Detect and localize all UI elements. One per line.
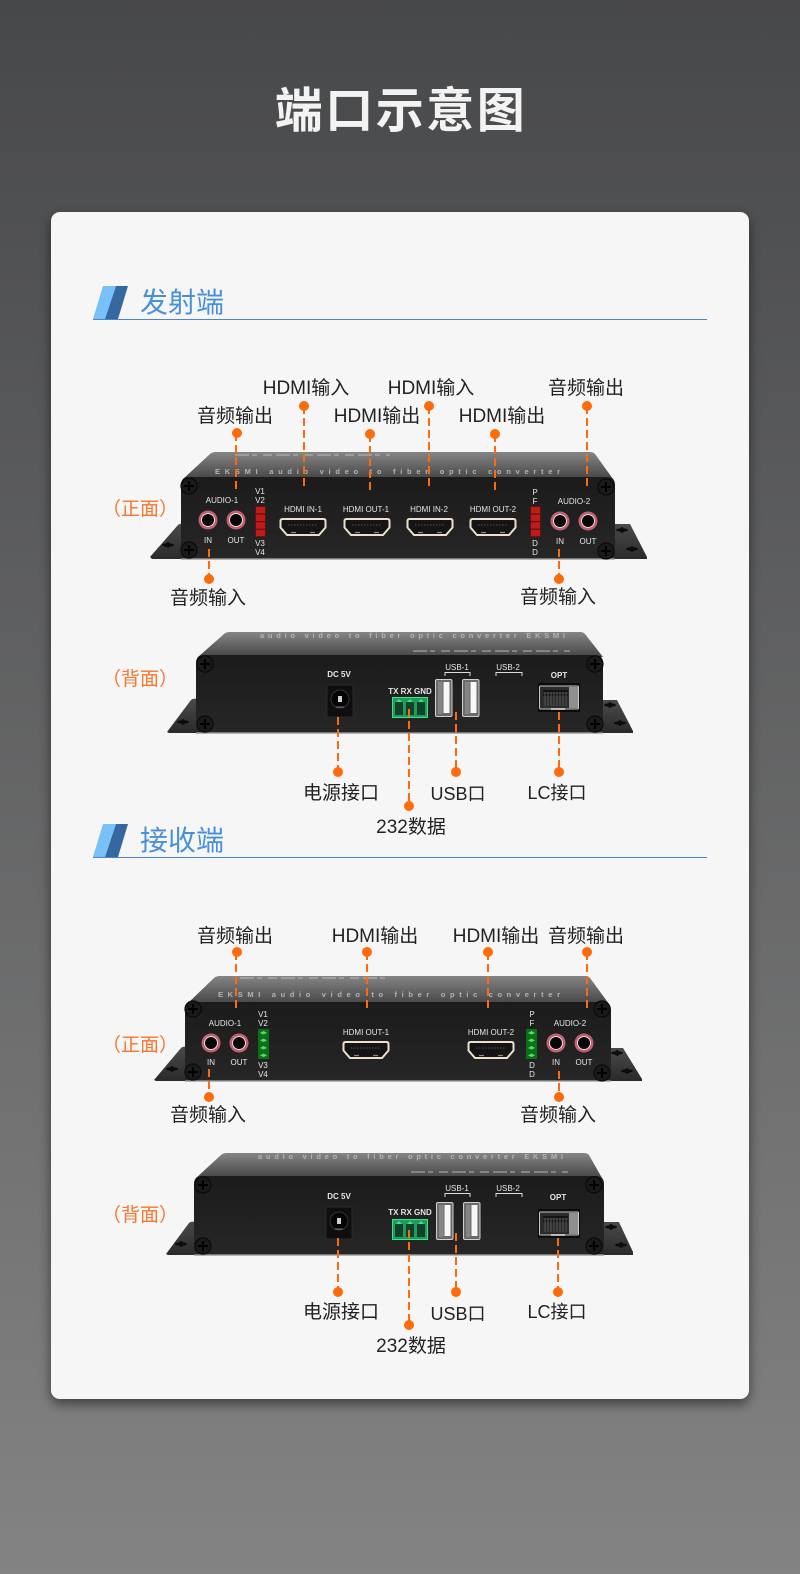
callout: power: 电源接口: [303, 1301, 379, 1323]
hdmi in-1: HDMI IN-1: [284, 505, 322, 514]
callout: audio out 1: [197, 405, 273, 492]
dc 5v port: [327, 670, 353, 717]
label: (背面): （背面）: [102, 1204, 178, 1226]
top printing: EKSMI audio video to fiber optic converter: [215, 467, 560, 476]
feet: [167, 699, 633, 733]
PFDD indicators: D: [529, 1070, 535, 1079]
callout: lc: [527, 712, 587, 803]
hdmi out-1: HDMI OUT-1: [343, 505, 390, 514]
usb-1 ports: USB-1: [445, 1184, 469, 1193]
audio-1 group: OUT: [228, 536, 245, 545]
label: (背面): （背面）: [102, 668, 178, 690]
callout: usb: USB口: [430, 1304, 486, 1324]
callout: usb: [430, 712, 486, 804]
usb-2 label: [496, 663, 522, 676]
audio-2 group: [546, 1019, 594, 1067]
rs232 terminal: TX RX GND: [388, 1208, 432, 1217]
callout: lc: [527, 1238, 587, 1322]
hdmi in-2: HDMI IN-2: [410, 505, 448, 514]
label: (正面): （正面）: [102, 1034, 178, 1056]
hdmi in-1: [280, 505, 326, 535]
rs232 terminal: [388, 687, 432, 718]
label: (正面): （正面）: [102, 498, 178, 520]
screws: [181, 478, 614, 559]
callout: audio out 2: [548, 925, 624, 1012]
transmitter front callouts: [102, 377, 624, 609]
top printing: EKSMI audio video to fiber optic converter: [218, 990, 560, 999]
audio-1 group: [198, 496, 246, 545]
receiver front device: [154, 976, 642, 1082]
audio-1 group: OUT: [231, 1058, 248, 1067]
base highlight: [181, 558, 615, 560]
callout: hdmi in 2: [388, 377, 474, 490]
main white panel: [51, 212, 749, 1399]
callout: audio out 1: [197, 925, 273, 1012]
callout: power: 电源接口: [303, 782, 379, 804]
callout: audio out 1: 音频输出: [197, 925, 273, 947]
callout: audio out 2: 音频输出: [548, 925, 624, 947]
hdmi out-2: [470, 505, 517, 535]
feet: [154, 1047, 642, 1081]
heading: 接收端: [93, 824, 707, 858]
PFDD indicators: F: [530, 1019, 535, 1028]
PFDD indicators: [530, 488, 541, 557]
callout: lc: LC接口: [527, 783, 587, 803]
rs232 terminal: TX RX GND: [388, 687, 432, 696]
hdmi out-1: [343, 1028, 390, 1058]
callout: hdmi out 1: [334, 405, 420, 492]
callout: audio out 2: 音频输出: [548, 377, 624, 399]
callout: hdmi out 1: HDMI输出: [334, 405, 420, 427]
rs232 terminal: [388, 1208, 432, 1240]
callout: usb: USB口: [430, 784, 486, 804]
callout: power: [303, 717, 379, 804]
audio-2 group: AUDIO-2: [558, 497, 591, 506]
callout: audio in 2: [520, 1071, 596, 1126]
callout: hdmi out 2: [453, 925, 539, 1012]
screws: [185, 1001, 610, 1081]
audio-2 group: IN: [552, 1058, 560, 1067]
callout: hdmi in 2: HDMI输入: [388, 377, 474, 399]
usb-1 ports: USB-1: [445, 663, 469, 672]
screws: [195, 1177, 602, 1254]
V indicators: V2: [258, 1019, 268, 1028]
callout: audio out 1: 音频输出: [197, 405, 273, 427]
heading: 接收端: 接收端: [140, 825, 224, 856]
callout: hdmi in 1: HDMI输入: [263, 377, 349, 399]
dc 5v port: DC 5V: [327, 1192, 351, 1201]
front face: [185, 1002, 611, 1081]
callout: hdmi in 1: [263, 377, 349, 490]
usb-2 label: USB-2: [496, 1184, 520, 1193]
PFDD indicators: D: [532, 539, 538, 548]
top surface: [187, 976, 609, 1004]
audio-1 group: AUDIO-1: [206, 496, 239, 505]
top printing: audio video to fiber optic converter EKSMI: [260, 631, 565, 640]
callout: hdmi out 1: [332, 925, 418, 1012]
V indicators: [258, 1010, 269, 1079]
audio-2 group: OUT: [580, 537, 597, 546]
receiver back callouts: [102, 1204, 587, 1357]
callout: audio in 1: [170, 549, 246, 609]
callout: audio in 1: 音频输入: [170, 587, 246, 609]
feet: [150, 524, 647, 559]
usb-2 label: USB-2: [496, 663, 520, 672]
audio-1 group: IN: [204, 536, 212, 545]
callout: 232 data: 232数据: [376, 816, 446, 838]
heading: 发射端: 发射端: [140, 287, 224, 318]
callout: hdmi out 1: HDMI输出: [332, 925, 418, 947]
back face: [194, 1176, 604, 1255]
opt port: OPT: [550, 1193, 566, 1202]
transmitter back callouts: [102, 668, 587, 838]
V indicators: V1: [255, 487, 265, 496]
audio-2 group: IN: [556, 537, 564, 546]
callout: audio in 2: 音频输入: [520, 1104, 596, 1126]
hdmi out-1: [343, 505, 390, 535]
base highlight: [185, 1080, 611, 1082]
PFDD indicators: D: [529, 1061, 535, 1070]
callout: audio in 1: [170, 1069, 246, 1126]
PFDD indicators: P: [529, 1010, 535, 1019]
top surface: [196, 1153, 602, 1178]
callout: hdmi out 2: [459, 405, 545, 492]
audio-2 group: AUDIO-2: [554, 1019, 587, 1028]
top surface: [198, 632, 603, 657]
base highlight: [194, 1254, 604, 1256]
callout: audio out 2: [548, 377, 624, 490]
callout: power: [303, 1238, 379, 1323]
hdmi out-2: HDMI OUT-2: [468, 1028, 515, 1037]
callout: audio in 2: 音频输入: [520, 586, 596, 608]
usb-1 ports: [436, 663, 479, 716]
transmitter front device: [150, 452, 647, 560]
V indicators: V3: [255, 539, 265, 548]
feet: [166, 1222, 633, 1255]
callout: lc: LC接口: [527, 1302, 587, 1322]
screws: [197, 656, 603, 732]
callout: hdmi out 2: HDMI输出: [453, 925, 539, 947]
usb-1 ports: [436, 1184, 480, 1240]
audio-1 group: [202, 1019, 248, 1067]
V indicators: [255, 487, 266, 557]
V indicators: V1: [258, 1010, 268, 1019]
dc 5v port: [326, 1192, 352, 1239]
callout: audio in 2: [520, 549, 596, 608]
heading: 发射端: [93, 286, 707, 320]
audio-1 group: IN: [207, 1058, 215, 1067]
top printing: audio video to fiber optic converter EKSMI: [258, 1152, 563, 1161]
hdmi out-2: [468, 1028, 515, 1058]
back face: [196, 655, 603, 733]
transmitter back device: [167, 631, 633, 734]
V indicators: V4: [255, 548, 265, 557]
base highlight: [196, 732, 603, 734]
usb-2 label: [496, 1184, 522, 1197]
audio-1 group: AUDIO-1: [209, 1019, 242, 1028]
callout: hdmi out 2: HDMI输出: [459, 405, 545, 427]
callout: 232 data: [376, 709, 446, 838]
PFDD indicators: D: [532, 548, 538, 557]
callout: usb: [430, 1233, 486, 1324]
audio-2 group: [550, 497, 598, 546]
front face: [181, 477, 615, 559]
V indicators: V3: [258, 1061, 268, 1070]
receiver front callouts: [102, 925, 624, 1126]
callout: 232 data: [376, 1230, 446, 1357]
V indicators: V2: [255, 496, 265, 505]
top surface: [183, 452, 613, 479]
audio-2 group: OUT: [576, 1058, 593, 1067]
callout: audio in 1: 音频输入: [170, 1104, 246, 1126]
hdmi out-2: HDMI OUT-2: [470, 505, 517, 514]
receiver back device: [166, 1152, 633, 1256]
opt port: [538, 1193, 580, 1238]
opt port: OPT: [551, 671, 567, 680]
hdmi out-1: HDMI OUT-1: [343, 1028, 390, 1037]
opt port: [538, 671, 580, 712]
PFDD indicators: [526, 1010, 537, 1079]
PFDD indicators: P: [532, 488, 538, 497]
PFDD indicators: F: [533, 497, 538, 506]
callout: 232 data: 232数据: [376, 1335, 446, 1357]
hdmi in-2: [408, 505, 452, 535]
title: 端口示意图: [275, 85, 527, 138]
V indicators: V4: [258, 1070, 268, 1079]
dc 5v port: DC 5V: [327, 670, 351, 679]
